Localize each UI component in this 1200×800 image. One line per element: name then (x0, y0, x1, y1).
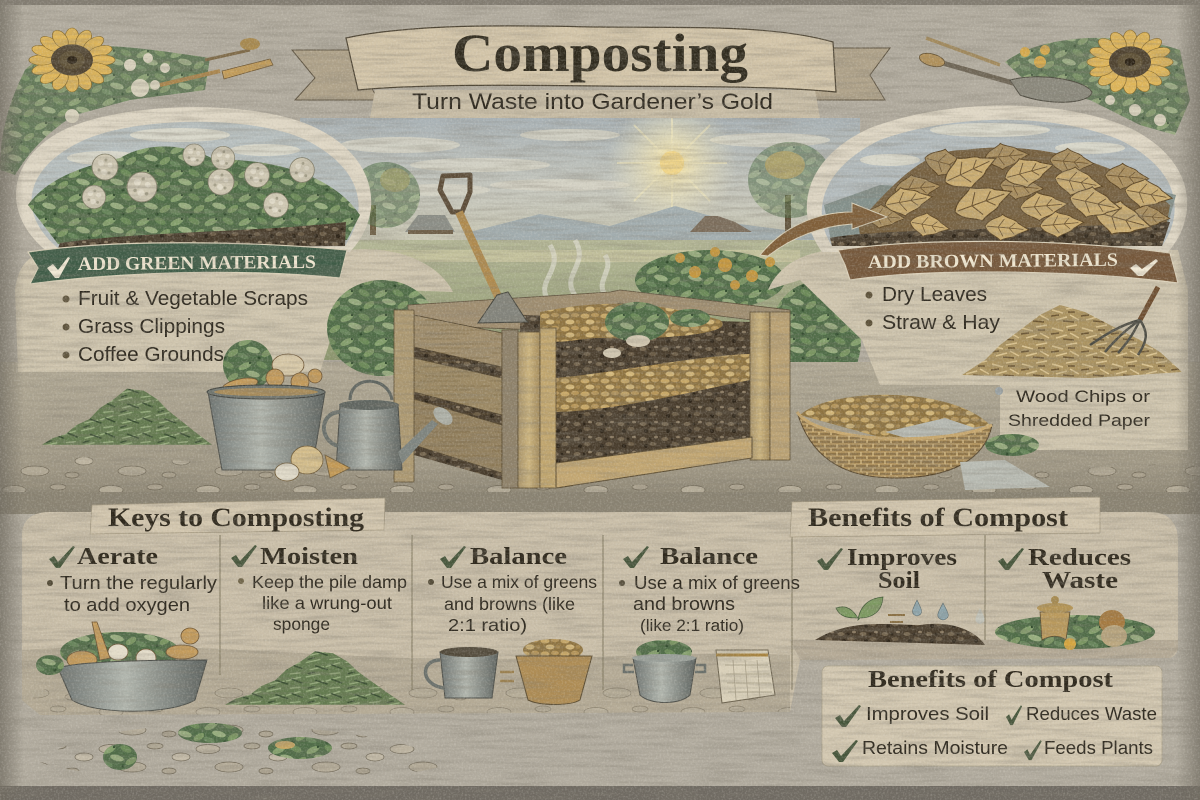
column: balance one: and browns (like (444, 594, 575, 614)
summary box (822, 666, 1162, 766)
column: aerate: to add oxygen (64, 595, 190, 615)
banner tail right (795, 48, 890, 100)
benefit: improves soil: Soil (878, 568, 920, 594)
equals sign (500, 672, 514, 681)
icon: check (832, 740, 858, 762)
panel: green materials (15, 107, 453, 372)
icon: sunflower (1087, 30, 1173, 94)
icon: seedling and soil (815, 597, 985, 645)
list: brown materials: Dry Leaves (882, 284, 987, 306)
subtitle: Turn Waste into Gardener’s Gold (412, 89, 773, 114)
heading: Keys to Composting (108, 503, 364, 532)
column: balance two: Use a mix of greens (634, 573, 800, 593)
column: moisten: like a wrung-out (262, 593, 392, 613)
ribbon label: ADD GREEN MATERIALS (78, 252, 316, 275)
icon: check (47, 257, 70, 278)
panel backdrop (768, 250, 1188, 450)
landscape scene (300, 98, 861, 398)
benefit: improves soil: Improves (847, 545, 957, 571)
list: green materials (62, 288, 308, 366)
icon: brown pot (516, 639, 592, 704)
ribbon: add green materials (28, 243, 347, 284)
icon: hand trowel (160, 38, 273, 85)
front board (556, 437, 752, 488)
vignette: green plants (28, 122, 360, 248)
list: brown materials (866, 284, 1000, 334)
text: wood chips (995, 387, 1150, 430)
icon: watering can (324, 381, 456, 470)
icon: check (1006, 705, 1022, 725)
icon: sun (607, 98, 737, 228)
arrow (760, 203, 887, 256)
flowering shrubs (635, 247, 861, 398)
column: balance two: and browns (633, 594, 735, 614)
green pile (42, 389, 212, 445)
compost bin (394, 175, 790, 488)
icon: check (440, 546, 466, 568)
column: balance one: Balance (470, 544, 567, 570)
icon: check (623, 546, 649, 568)
icon: pitchfork (1090, 287, 1158, 355)
bottom border (0, 786, 1200, 800)
column: moisten (225, 544, 407, 705)
icon: calendar (716, 650, 775, 703)
summary box: Feeds Plants (1044, 737, 1153, 758)
benefit: reduces waste: Waste (1042, 568, 1118, 594)
icon: bowl of scraps (36, 622, 207, 711)
icon: check (231, 545, 257, 567)
heading: Benefits of Compost (808, 503, 1068, 532)
column: aerate (36, 544, 217, 711)
icon: compost bucket (207, 340, 325, 470)
summary box: Reduces Waste (1026, 703, 1157, 724)
list: brown materials: Straw & Hay (882, 312, 1000, 334)
icon: metal mug (425, 647, 498, 698)
title banner (292, 23, 890, 118)
subtitle band (370, 90, 820, 118)
icon: wood chip pile (962, 305, 1182, 378)
tree (748, 142, 832, 240)
top right decoration (918, 30, 1190, 135)
heading tab (90, 498, 385, 534)
bin posts (394, 310, 790, 488)
icon: check (835, 705, 861, 727)
vignette frame (16, 107, 371, 252)
summary box: Retains Moisture (862, 737, 1008, 758)
smoke (545, 240, 608, 300)
panel: benefits of compost (790, 497, 1162, 766)
clover blooms (82, 144, 314, 217)
panel backdrop (15, 249, 453, 372)
column: moisten: Moisten (260, 544, 358, 570)
column: aerate: Turn the regularly (60, 573, 217, 593)
heading tab (790, 497, 1100, 537)
title: Composting (452, 23, 748, 83)
icon: check (817, 548, 843, 570)
panel background (22, 512, 1178, 715)
banner main (346, 26, 836, 92)
column: moisten: sponge (273, 614, 330, 634)
panel: keys to composting (22, 498, 1178, 715)
icon: pot of greens (624, 640, 705, 702)
back rails (408, 290, 790, 330)
text: wood chips: Wood Chips or (1016, 387, 1150, 406)
panel: brown materials (760, 106, 1188, 450)
icon: check (1130, 259, 1158, 276)
vignette frame (807, 106, 1187, 252)
bottom rubble and plants (40, 723, 445, 780)
banner tail left (292, 50, 378, 100)
icon: check (998, 548, 1024, 570)
benefit: improves soil (815, 545, 985, 645)
list: green materials: Coffee Grounds (78, 344, 224, 366)
icon: check (49, 546, 75, 568)
ribbon label: ADD BROWN MATERIALS (868, 250, 1118, 273)
list: green materials: Fruit & Vegetable Scraps (78, 288, 308, 310)
top left decoration (0, 28, 273, 175)
column: balance one: Use a mix of greens (441, 572, 597, 592)
icon: barn right (690, 216, 752, 232)
icon: eggshells (275, 446, 350, 481)
icon: grass pile (225, 651, 405, 705)
text: wood chips: Shredded Paper (1008, 411, 1150, 430)
list: green materials: Grass Clippings (78, 316, 225, 338)
icon: garden tools (918, 38, 1092, 102)
summary box: Improves Soil (866, 703, 989, 724)
icon: shovel (440, 175, 528, 323)
shrub left of bin (327, 280, 437, 376)
icon: compost jar and greens (995, 596, 1155, 650)
icon: barn left (405, 215, 455, 234)
ribbon: add brown materials (838, 241, 1178, 283)
icon: basket (797, 395, 1050, 490)
icon: check (1024, 740, 1042, 760)
summary box: Benefits of Compost (868, 667, 1113, 693)
tree (350, 162, 420, 235)
benefit: reduces waste (995, 545, 1155, 650)
benefit: reduces waste: Reduces (1028, 545, 1131, 571)
compost layers (520, 302, 750, 466)
column: balance two: (like 2:1 ratio) (640, 616, 744, 635)
icon: sunflower (29, 28, 115, 92)
column: balance one (425, 544, 597, 704)
column: balance two (619, 544, 800, 703)
column: balance one: 2:1 ratio) (448, 615, 527, 635)
column: aerate: Aerate (77, 544, 158, 570)
left side boards (414, 315, 502, 480)
column: balance two: Balance (660, 544, 758, 570)
ground (0, 362, 1200, 512)
column: moisten: Keep the pile damp (252, 572, 407, 592)
vignette: brown leaves (822, 120, 1176, 246)
